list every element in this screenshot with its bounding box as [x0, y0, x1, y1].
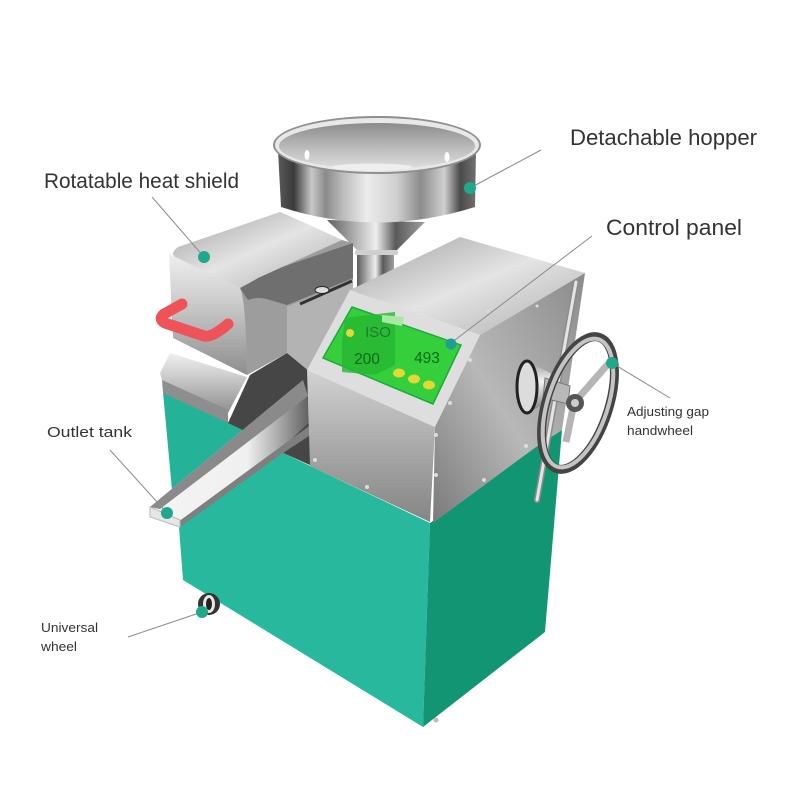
machine illustration — [150, 116, 629, 727]
green control screen — [323, 307, 461, 404]
callout: outlet tank — [47, 424, 173, 519]
red handle — [161, 304, 228, 336]
control box — [307, 237, 585, 523]
lower steel band — [160, 353, 247, 423]
callout: detachable hopper — [464, 125, 757, 194]
callout: universal wheel — [40, 606, 208, 654]
universal wheel — [198, 593, 220, 615]
outlet tank — [150, 380, 312, 527]
green control screen: ISO — [365, 324, 391, 341]
callout: adjusting gap handwheel: Adjusting gap — [627, 405, 709, 419]
detachable hopper — [273, 116, 481, 255]
teal base right face — [423, 430, 562, 727]
callout: detachable hopper: Detachable hopper — [570, 125, 757, 150]
green control screen: 493 — [414, 350, 440, 367]
teal base rear panel — [163, 392, 283, 527]
rotatable heat shield — [169, 212, 353, 375]
callout: rotatable heat shield: Rotatable heat shield — [44, 170, 239, 193]
callout: adjusting gap handwheel — [606, 357, 709, 438]
callout: outlet tank: Outlet tank — [47, 424, 133, 441]
foot — [434, 718, 438, 722]
callout: universal wheel: Universal — [41, 621, 98, 635]
callout: control panel — [446, 215, 742, 350]
callout: adjusting gap handwheel: handwheel — [627, 424, 693, 438]
callout: universal wheel: wheel — [40, 640, 77, 654]
callout: control panel: Control panel — [606, 215, 742, 240]
hopper neck — [357, 250, 394, 300]
dark chute — [228, 353, 312, 466]
green control screen: 200 — [354, 351, 380, 368]
callout: rotatable heat shield — [44, 170, 239, 263]
adjusting gap handwheel — [517, 328, 629, 478]
teal base front face — [179, 453, 430, 727]
